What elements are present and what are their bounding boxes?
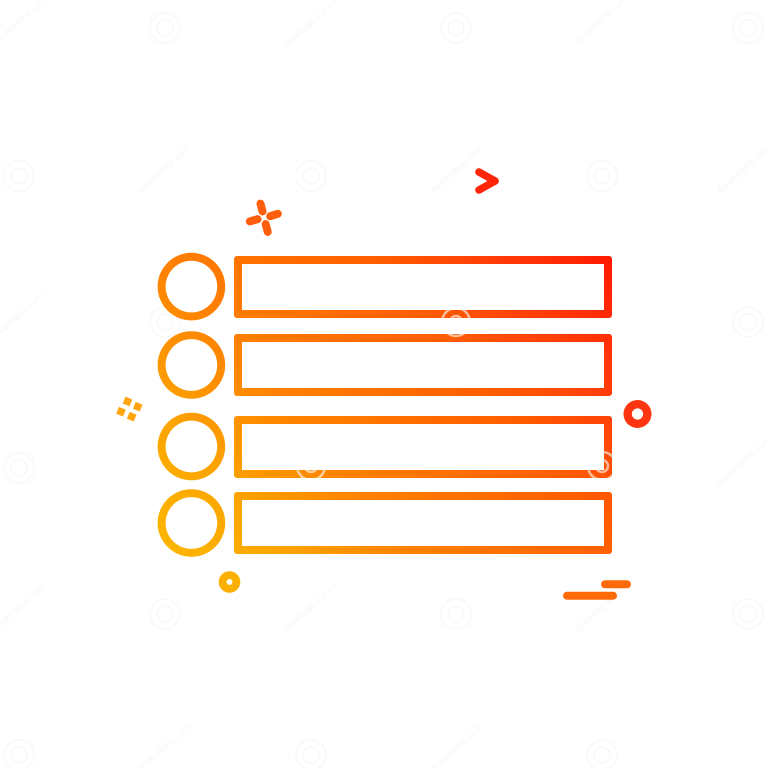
- list row 4 bullet: [158, 489, 225, 557]
- list row 2 bullet: [158, 331, 225, 399]
- list row 1 bullet: [158, 253, 225, 320]
- list row 3 bullet: [158, 413, 225, 480]
- list row 2 bar: [234, 334, 612, 396]
- faint watermark text: dreamstime.com: [282, 582, 338, 634]
- decorative icon: chevron: [474, 167, 500, 195]
- watermark over the icon: [297, 308, 616, 480]
- decorative icon: small checker squares: [116, 397, 143, 422]
- list row 3 bar: [234, 416, 612, 478]
- decorative icon: small yellow ring: [219, 571, 240, 593]
- faint watermark text: dreamstime.com: [573, 582, 629, 634]
- faint watermark text: dreamstime.com: [135, 144, 191, 196]
- decorative icon: small red ring: [624, 400, 652, 428]
- decorative icon: two dashes: [563, 580, 631, 600]
- list row 4 bar: [234, 492, 612, 554]
- decorative icon: four-petal sparkle: [245, 199, 283, 237]
- list icon: [158, 253, 612, 557]
- list row 1 bar: [234, 256, 612, 318]
- faint watermark text: dreamstime.com: [428, 144, 484, 196]
